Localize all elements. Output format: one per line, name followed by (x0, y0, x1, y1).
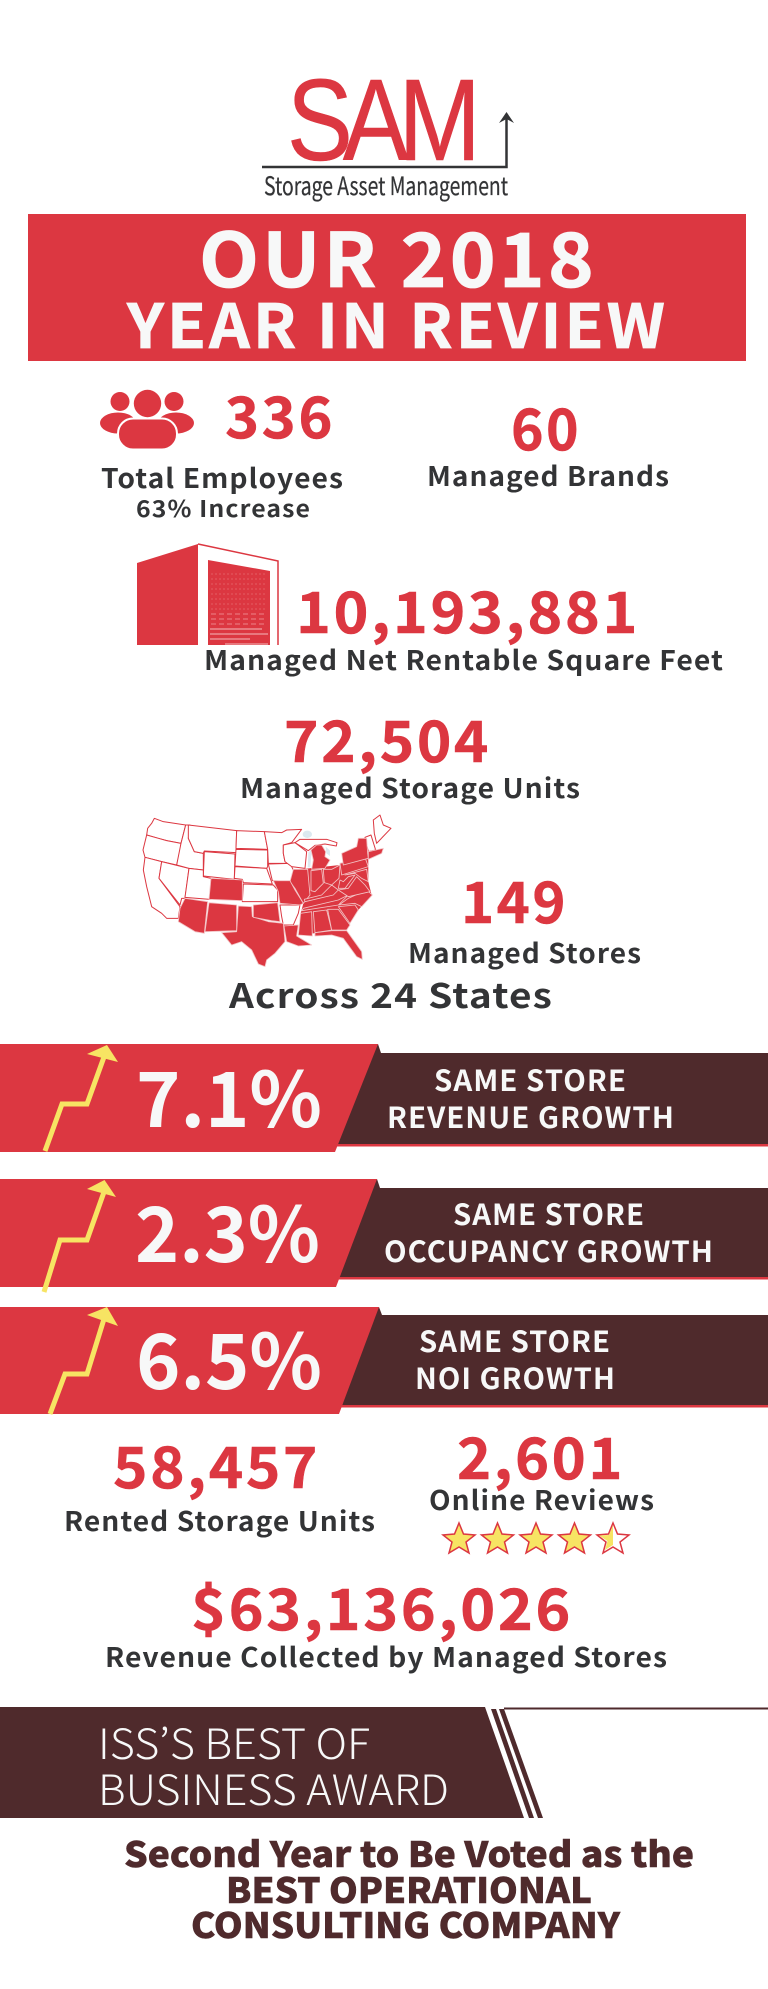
stat: revenue collected (105, 1565, 668, 1675)
title banner (28, 200, 746, 366)
stat: net rentable square feet (204, 568, 724, 678)
stat: revenue collected: Revenue Collected by Managed Stores (105, 1636, 668, 1675)
panel: revenue growth: SAME STORE (434, 1058, 627, 1100)
text: across 24 states: Across 24 States (228, 969, 553, 1018)
stat: total employees (101, 373, 344, 524)
stat: rented storage units: Rented Storage Units (64, 1500, 376, 1539)
stat: managed storage units: Managed Storage Units (240, 767, 581, 806)
panel: NOI growth: NOI GROWTH (415, 1356, 616, 1398)
stat: managed brands: Managed Brands (427, 455, 670, 494)
text: award description: CONSULTING COMPANY (191, 1898, 621, 1949)
panel: NOI growth: 6.5% (136, 1301, 322, 1411)
stat: managed brands (427, 385, 670, 494)
logo: SAM Storage Asset Management: SAM (287, 55, 481, 185)
panel: revenue growth: REVENUE GROWTH (387, 1095, 675, 1137)
stat: managed storage units (240, 697, 581, 806)
stat: revenue collected: $63,136,026 (191, 1565, 573, 1647)
stat: total employees: 63% Increase (136, 490, 311, 524)
panel: revenue growth: 7.1% (136, 1039, 322, 1149)
map: managed-state underlay (290, 858, 372, 935)
text: award description (124, 1827, 694, 1949)
logo: SAM Storage Asset Management: Storage Asset Management (264, 167, 508, 203)
panel: occupancy growth: OCCUPANCY GROWTH (384, 1229, 714, 1271)
icon: yellow arrow (44, 1180, 116, 1292)
stat: online reviews (429, 1414, 655, 1553)
panel: NOI growth (0, 1301, 768, 1414)
stat: managed stores (408, 858, 642, 971)
stat: managed stores: Managed Stores (408, 932, 642, 971)
panel: award banner: BUSINESS AWARD (98, 1757, 449, 1818)
panel: award banner: ISS’S BEST OF (98, 1711, 370, 1772)
text: award description: BEST OPERATIONAL (226, 1863, 592, 1914)
text: award description: Second Year to Be Voted as the (124, 1827, 694, 1878)
stat: rented storage units (64, 1423, 376, 1539)
icon: rating stars (443, 1523, 629, 1553)
panel: occupancy growth (0, 1174, 768, 1292)
stat: managed brands: 60 (511, 385, 581, 467)
stat: online reviews: 2,601 (457, 1414, 625, 1496)
chart: US map of managed states (143, 815, 391, 967)
stat: managed storage units: 72,504 (284, 697, 491, 779)
logo: SAM Storage Asset Management (262, 55, 514, 203)
panel: award banner (0, 1707, 768, 1818)
stat: net rentable square feet: Managed Net Rentable Square Feet (204, 639, 724, 678)
stat: total employees: Total Employees (101, 457, 344, 496)
panel: occupancy growth: 2.3% (135, 1174, 320, 1284)
stat: net rentable square feet: 10,193,881 (296, 568, 640, 650)
title banner: OUR 2018 (199, 200, 597, 309)
panel: occupancy growth: SAME STORE (453, 1192, 645, 1234)
panel: revenue growth (0, 1039, 768, 1152)
stat: total employees: 336 (225, 373, 335, 455)
stat: managed stores: 149 (461, 858, 568, 940)
panel: NOI growth: SAME STORE (419, 1319, 611, 1361)
title banner: YEAR IN REVIEW (126, 277, 668, 366)
icon: yellow arrow (50, 1307, 118, 1414)
stat: rented storage units: 58,457 (113, 1423, 320, 1505)
icon: storage unit (137, 544, 278, 645)
stat: online reviews: Online Reviews (429, 1479, 655, 1518)
icon: yellow arrow (45, 1045, 118, 1151)
icon: people (100, 390, 194, 450)
